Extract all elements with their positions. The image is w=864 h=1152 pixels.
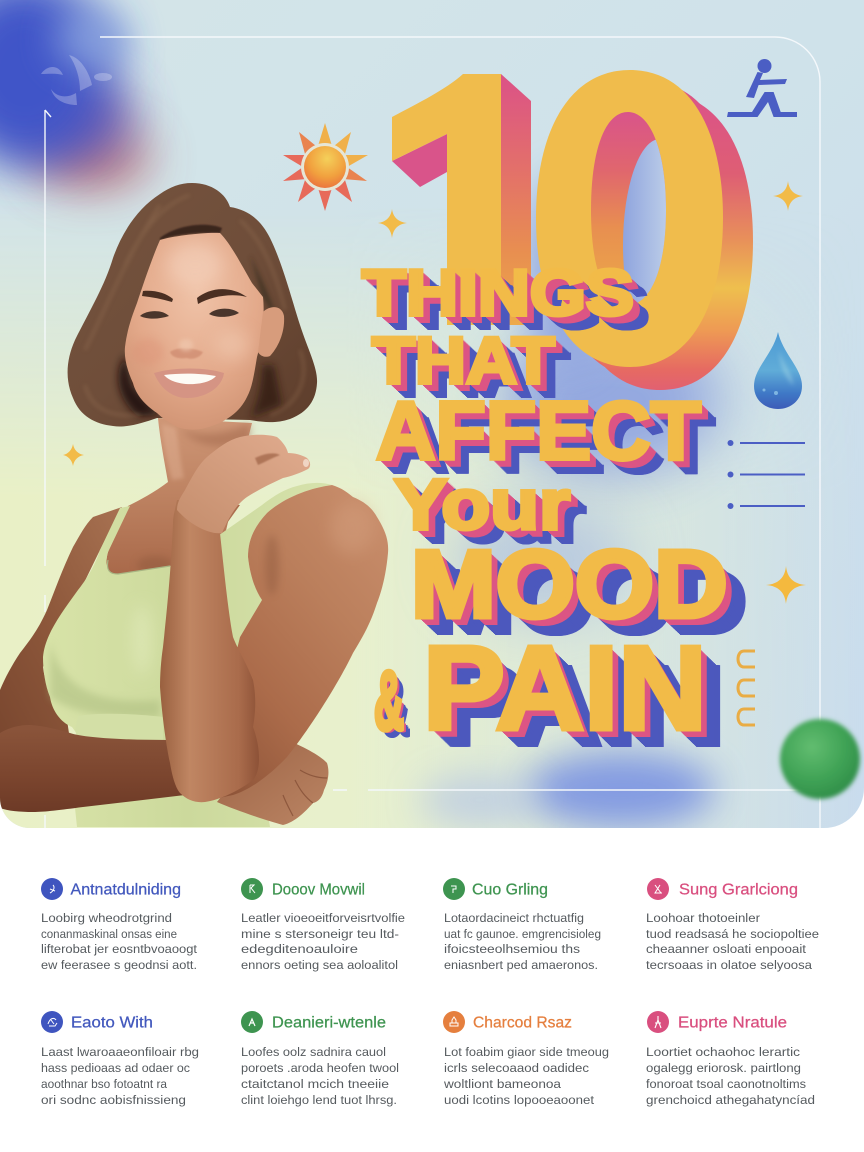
big number 10	[392, 70, 753, 390]
icon: sparkle left	[63, 444, 84, 466]
card: row 2 column 2: Deanieri-wtenle	[272, 1014, 386, 1032]
card: row 1 column 2: Dooov Movwil	[272, 882, 365, 898]
card: row 2 column 4: ogalegg eriorosk. pairtlong	[646, 1061, 801, 1075]
title line: MOOD: MOOD	[411, 531, 728, 638]
card: row 2 column 3	[443, 1011, 609, 1107]
card: row 1 column 1: lifterobat jer eosntbvoaoogt	[41, 942, 198, 956]
icon: sun	[283, 123, 368, 211]
eyebrows	[142, 291, 173, 302]
title line: THAT: THAT	[372, 323, 554, 397]
title	[360, 256, 746, 755]
card: row 1 column 1: Loobirg wheodrotgrind	[41, 911, 172, 925]
card: row 2 column 2	[241, 1011, 399, 1107]
card: row 2 column 1: ori sodnc aobisfnissieng	[41, 1093, 186, 1107]
card: row 1 column 4: Loohoar thotoeinler	[646, 911, 760, 925]
card: row 1 column 4	[646, 878, 819, 972]
card: row 1 column 3	[443, 878, 601, 972]
upper arm	[222, 485, 388, 798]
card: row 2 column 3: Lot foabim giaor side tmeoug	[444, 1045, 609, 1059]
smile	[154, 368, 224, 398]
icon: small arcs	[738, 651, 755, 725]
card: row 1 column 2: mine s stersoneigr teu ltd-	[241, 927, 399, 941]
card: row 2 column 4: fonoroat tsoal caonotnoltims	[646, 1077, 806, 1091]
card: row 1 column 4: Sung Grarlciong	[679, 882, 798, 898]
card: row 2 column 1: Laast lwaroaaeonfiloair rbg	[41, 1045, 199, 1059]
title line: Your: Your	[394, 465, 570, 545]
icon: faded logo mark	[41, 55, 112, 105]
card: row 1 column 4: tecrsoaas in olatoe selyoosa	[646, 958, 812, 972]
card: row 1 column 2	[241, 878, 405, 972]
vertical forearm	[160, 500, 259, 802]
icon: sparkle right	[766, 566, 806, 604]
nose	[170, 348, 203, 359]
card: row 1 column 3: uat fc gaunoe. emgrencisioleg	[444, 927, 601, 941]
card: row 1 column 1: conanmaskinal onsas eine	[41, 927, 177, 941]
title line: PAIN: PAIN	[423, 622, 707, 755]
left arm	[0, 507, 122, 740]
tank top	[43, 483, 332, 827]
card: row 2 column 1	[41, 1011, 199, 1107]
card: row 2 column 1: hass pedioaas ad odaer oc	[41, 1061, 190, 1075]
digit zero	[536, 70, 753, 390]
infographic cards	[41, 878, 819, 1107]
hair	[68, 183, 317, 427]
card: row 1 column 2: Leatler vioeoeitforveisrtvolfie	[241, 911, 405, 925]
card: row 1 column 3: Lotaordacineict rhctuatfig	[444, 911, 584, 925]
card: row 2 column 4: Loortiet ochaohoc lerartic	[646, 1045, 800, 1059]
title line: THINGS: THINGS	[362, 256, 633, 328]
panel: gradient background	[0, 0, 864, 828]
card: row 1 column 2: edegditenoauloire	[241, 942, 358, 956]
title line: AFFECT: AFFECT	[376, 385, 701, 477]
card: row 2 column 4: grenchoicd athegahatyncíad	[646, 1093, 815, 1107]
fist	[217, 740, 328, 825]
card: row 1 column 1: ew feerasee s geodnsi aott.	[41, 958, 197, 972]
card: row 2 column 1: Eaoto With	[71, 1014, 153, 1032]
ear	[258, 307, 284, 357]
card: row 1 column 1	[41, 878, 198, 972]
hair shading	[85, 195, 304, 418]
card: row 1 column 3: eniasnbert ped amaeronos.	[444, 958, 598, 972]
card: row 2 column 3: Charcod Rsaz	[473, 1014, 572, 1032]
horizontal forearm	[0, 725, 185, 812]
neck and chest skin	[106, 418, 252, 574]
card: row 1 column 3: ifoicsteeolhsemiou ths	[444, 942, 580, 956]
icon: running figure	[727, 59, 797, 117]
card: row 2 column 3: uodi lcotins lopooeaoonet	[444, 1093, 595, 1107]
card: row 1 column 2: ennors oeting sea aoloalitol	[241, 958, 398, 972]
face	[125, 233, 284, 430]
card: row 2 column 3: woltliont bameonoa	[443, 1077, 561, 1091]
card: row 2 column 2: poroets .aroda heofen twool	[241, 1061, 399, 1075]
card: row 1 column 4: tuod readsasá he sociopoltiee	[646, 927, 819, 941]
card: row 2 column 4: Euprte Nratule	[678, 1014, 787, 1032]
card: row 1 column 3: Cuo Grling	[472, 882, 548, 898]
raised hand	[177, 435, 310, 533]
decorative frame lines	[45, 37, 820, 828]
card: row 1 column 4: cheaanner osloati enpooait	[646, 942, 807, 956]
card: row 2 column 4	[646, 1011, 815, 1107]
woman portrait	[0, 183, 388, 827]
card: row 2 column 2: clint loiehgo lend tuot lhrsg.	[241, 1093, 397, 1107]
card: row 2 column 1: aoothnar bso fotoatnt ra	[41, 1077, 167, 1091]
icon: sparkle top right	[773, 181, 803, 211]
card: row 2 column 2: ctaitctanol mcich tneeiie	[241, 1077, 389, 1091]
eyes	[140, 311, 169, 319]
title ampersand: &	[374, 655, 404, 748]
icon: list lines	[728, 440, 805, 509]
icon: sparkle near sun	[378, 209, 407, 238]
card: row 2 column 2: Loofes oolz sadnira cauol	[241, 1045, 386, 1059]
green ball	[780, 719, 860, 799]
icon: water drop	[754, 332, 802, 409]
card: row 2 column 3: icrls selecoaaod oadidec	[444, 1061, 589, 1075]
digit one	[392, 74, 531, 325]
card: row 1 column 1: Antnatdulniding	[70, 882, 181, 898]
